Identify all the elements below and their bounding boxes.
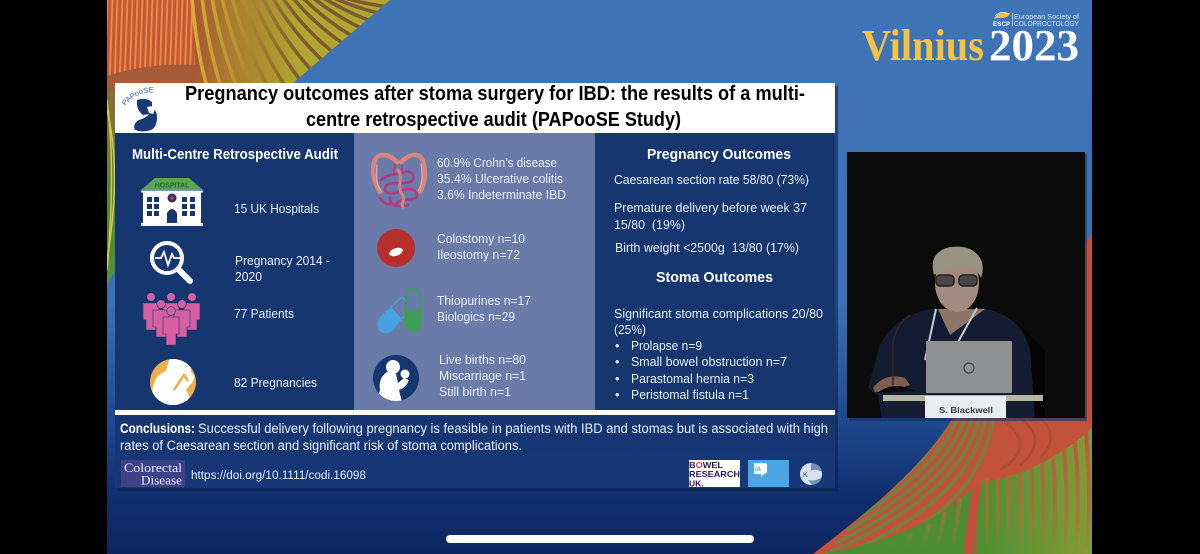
text: pregnancy results: 15/80 (19%) [614, 217, 685, 232]
lectern [883, 395, 1043, 401]
icon: intestines [373, 155, 425, 207]
text: stoma results: Small bowel obstruction n=7 [631, 354, 787, 369]
conclusions text: Successful delivery following pregnancy is feasible in patients with IBD and stomas but is associated with high [198, 421, 828, 436]
conference name: Vilnius [862, 21, 984, 70]
title [185, 82, 805, 131]
heading: stoma outcomes: Stoma Outcomes [656, 269, 773, 286]
logo: IA [748, 460, 789, 487]
footer panel [115, 410, 835, 488]
logo: ESCP [993, 12, 1079, 28]
logo: globe [800, 463, 822, 485]
text: diagnoses [437, 155, 566, 202]
conference year: 2023 [989, 21, 1079, 70]
label: pregnancy dates: 2020 [235, 269, 262, 284]
slide header with title [115, 82, 835, 133]
text: stoma types [437, 231, 525, 262]
icon: patients [143, 293, 200, 345]
presenter video [847, 152, 1087, 421]
logo: Bowel Research UK [689, 460, 740, 488]
text: diagnoses: 60.9% Crohn’s disease [437, 155, 557, 170]
panel: outcomes [595, 133, 835, 410]
logo: Bowel Research UK: BOWEL [689, 460, 723, 470]
icon: stoma [377, 229, 415, 267]
laptop [926, 341, 1012, 393]
text: stoma results: • [615, 371, 620, 386]
logo: ESCP: European Society of [1014, 14, 1079, 21]
text: birth outcomes: Miscarriage n=1 [439, 368, 526, 383]
logo: Bowel Research UK: UK. [689, 478, 704, 488]
text: stoma results: Parastomal hernia n=3 [631, 371, 754, 386]
text: stoma results: • [615, 354, 620, 369]
text: stoma types: Ileostomy n=72 [437, 247, 520, 262]
panel: multi-centre audit [115, 133, 354, 410]
logo: PAPooSE: PAPooSE [122, 87, 154, 106]
title: centre retrospective audit (PAPooSE Study) [306, 108, 681, 131]
icon: magnifier [152, 243, 190, 281]
text: stoma results [614, 306, 823, 402]
logo: ESCP: COLOPROCTOLOGY [1014, 21, 1079, 28]
decoration: top-left arcs [107, 0, 390, 285]
text: pregnancy results: Premature delivery before week 37 [614, 200, 807, 215]
conference logo [862, 12, 1079, 70]
label: pregnancy dates [235, 253, 330, 284]
name card [925, 396, 1006, 418]
icon: capsules [378, 289, 420, 333]
text: pregnancy results [614, 172, 809, 255]
label: hospitals: 15 UK Hospitals [234, 201, 319, 216]
text: diagnoses: 35.4% Ulcerative colitis [437, 171, 563, 186]
text: birth outcomes [439, 352, 526, 399]
label: patients: 77 Patients [234, 306, 294, 321]
text: stoma results: Significant stoma complications 20/80 [614, 306, 823, 321]
text: stoma results: Peristomal fistula n=1 [631, 387, 749, 402]
doi link: https://doi.org/10.1111/codi.16098 [191, 470, 366, 482]
conclusions text: Conclusions: [120, 421, 195, 436]
name card: S. Blackwell [939, 405, 993, 415]
text: birth outcomes: Live births n=80 [439, 352, 526, 367]
logo: IA: IA [755, 467, 762, 473]
text: stoma results: (25%) [614, 322, 646, 337]
text: diagnoses: 3.6% Indeterminate IBD [437, 187, 566, 202]
text: stoma results: • [615, 338, 620, 353]
heading: pregnancy outcomes: Pregnancy Outcomes [647, 146, 791, 163]
slide shadow [117, 86, 838, 491]
text: pregnancy results: Birth weight <2500g 13/80 (17%) [615, 240, 799, 255]
label: pregnancy dates: Pregnancy 2014 - [235, 253, 330, 268]
label: pregnancies: 82 Pregnancies [234, 375, 317, 390]
text: medication [437, 293, 531, 324]
text: medication: Biologics n=29 [437, 309, 515, 324]
text: stoma results: • [615, 387, 620, 402]
text: pregnancy results: Caesarean section rate 58/80 (73%) [614, 172, 809, 187]
logo: Colorectal Disease: Colorectal [124, 460, 182, 475]
conclusions text [120, 421, 828, 453]
icon: pregnant woman [150, 357, 196, 407]
logo: globe: K [803, 472, 808, 479]
logo: Colorectal Disease: Disease [141, 472, 182, 488]
text: stoma types: Colostomy n=10 [437, 231, 525, 246]
icon: mother and baby [373, 355, 419, 402]
title: Pregnancy outcomes after stoma surgery for IBD: the results of a multi- [185, 82, 805, 105]
text: stoma results: Prolapse n=9 [631, 338, 702, 353]
home indicator [446, 535, 754, 543]
decoration: bottom-right arcs [810, 233, 1095, 554]
logo: ESCP: ESCP [993, 22, 1010, 28]
text: birth outcomes: Still birth n=1 [439, 384, 511, 399]
presenter [868, 247, 1045, 418]
panel: patient characteristics [354, 133, 595, 410]
logo: Colorectal Disease [121, 460, 185, 488]
icon: hospital [141, 178, 203, 226]
logo: PAPooSE [122, 87, 158, 132]
heading: audit: Multi-Centre Retrospective Audit [132, 146, 338, 163]
logo: Bowel Research UK: RESEARCH [689, 469, 740, 479]
icon: hospital: HOSPITAL [155, 182, 190, 190]
text: medication: Thiopurines n=17 [437, 293, 531, 308]
conclusions text: rates of Caesarean section and significant risk of stoma complications. [120, 438, 522, 453]
